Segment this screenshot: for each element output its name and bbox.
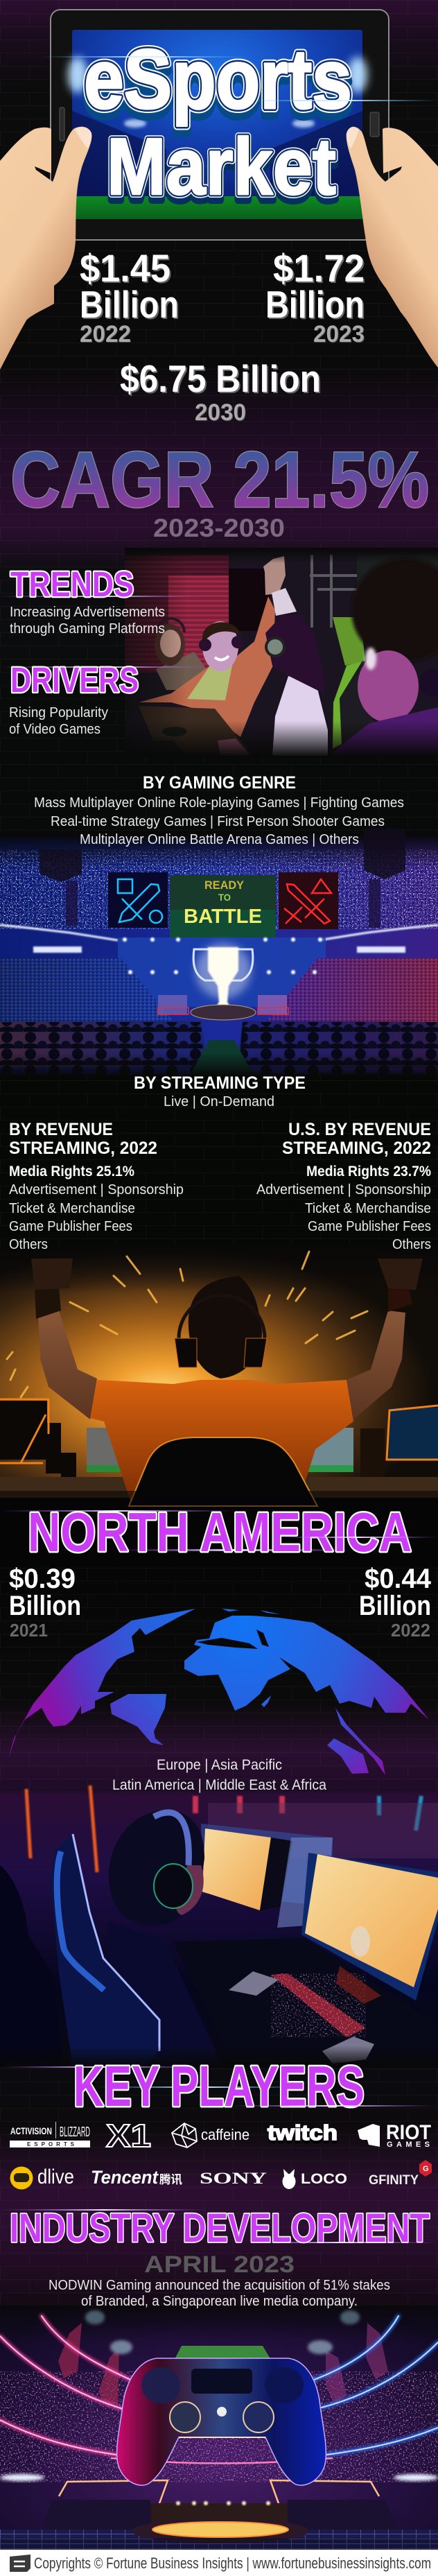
logo: twitch: twitch <box>268 2120 338 2145</box>
U.S. revenue heading: STREAMING, 2022 <box>282 1139 431 1158</box>
indonesia islands <box>335 1708 385 1775</box>
revenue list: Ticket & Merchandise <box>9 1201 135 1216</box>
back wall tint <box>208 1803 438 1858</box>
streaming list: Live | On-Demand <box>164 1094 274 1109</box>
flare <box>0 1510 236 1512</box>
right monitor <box>301 1853 438 2000</box>
revenue list: Advertisement | Sponsorship <box>9 1182 184 1198</box>
logo: dlive <box>10 2166 74 2190</box>
other regions list: Europe | Asia Pacific <box>157 1757 282 1773</box>
ready to battle text: TO <box>218 892 231 903</box>
2023 value <box>265 246 365 347</box>
center screen <box>170 875 276 937</box>
trends heading: TRENDS <box>10 564 134 604</box>
red blinds wall <box>125 555 270 673</box>
logo: activision blizzard esports <box>10 2122 90 2147</box>
pink neon arcs <box>0 2316 135 2455</box>
ready to battle text: BATTLE <box>184 906 262 928</box>
madagascar <box>261 1695 271 1707</box>
ready to battle text <box>184 879 262 928</box>
woman on left <box>155 619 207 690</box>
left hand <box>0 127 91 370</box>
fade to black <box>0 1491 438 1512</box>
tablet screen stadium <box>68 30 367 219</box>
eurasia and africa continent <box>184 1616 429 1720</box>
lens flare <box>42 56 249 58</box>
title: eSports Market: eSports <box>84 32 352 126</box>
mid wall <box>118 937 326 1007</box>
U.S. revenue list: Others <box>392 1237 431 1252</box>
other regions list: Latin America | Middle East & Africa <box>112 1777 326 1793</box>
left inner monitor <box>87 1428 133 1472</box>
2022 value: $0.44 <box>365 1564 432 1594</box>
photo: gamers high-five <box>125 548 438 757</box>
tablet side buttons <box>60 107 379 141</box>
left monitor <box>201 1824 333 1928</box>
2030 value <box>120 357 321 426</box>
revenue heading: BY REVENUE <box>9 1120 113 1139</box>
footer logo <box>10 2555 30 2572</box>
left arm and fist <box>31 1259 97 1419</box>
gaming chair <box>129 1437 317 1506</box>
other regions list <box>112 1757 326 1793</box>
2023 value: Billion <box>265 283 365 326</box>
desk <box>0 1477 438 1503</box>
man smiling with raised arm <box>139 556 297 737</box>
U.S. revenue list: Game Publisher Fees <box>308 1219 431 1234</box>
globe map <box>8 1609 429 1775</box>
drivers text: of Video Games <box>9 721 100 737</box>
foreground player <box>328 558 438 756</box>
logo: tencent: 腾讯 <box>159 2173 182 2186</box>
front crowd <box>0 1021 438 1076</box>
inland seas <box>197 1630 269 1649</box>
U.S. revenue list: Ticket & Merchandise <box>305 1201 431 1216</box>
2022 value <box>359 1564 432 1641</box>
2023 value: $1.72 <box>273 246 365 290</box>
bottom neon arc <box>111 2458 333 2463</box>
background glow bars <box>26 1786 421 1872</box>
thumb nails <box>75 128 359 148</box>
media rights: Media Rights 25.1% <box>9 1164 134 1179</box>
flare <box>277 1537 438 1538</box>
north america continent <box>8 1609 195 1759</box>
description: NODWIN Gaming announced the acquisition of 51% stakes <box>49 2278 390 2293</box>
2021 value: $0.39 <box>9 1564 76 1594</box>
revenue list: Others <box>9 1237 48 1252</box>
stage structure <box>0 2480 438 2550</box>
logo: gfinity <box>369 2160 432 2188</box>
title: eSports Market: eSports <box>84 32 352 126</box>
head and headphones <box>175 1276 267 1378</box>
revenue heading: STREAMING, 2022 <box>9 1139 157 1158</box>
green panel <box>172 2346 274 2365</box>
flare <box>0 2066 201 2068</box>
logos row one: BLIZZARD <box>60 2125 90 2140</box>
2022 value: $1.45 <box>80 246 170 290</box>
2030 value: $6.75 Billion <box>120 357 321 400</box>
gamer body <box>107 1921 223 2067</box>
title: eSports Market: eSports <box>84 39 352 133</box>
north america heading <box>0 1501 438 1563</box>
drivers block <box>0 660 208 737</box>
banners and smoke <box>58 2310 388 2406</box>
north america values <box>9 1564 432 1641</box>
tablet body <box>51 10 389 240</box>
title: eSports Market: Market <box>107 121 336 211</box>
revenue list: Game Publisher Fees <box>9 1219 132 1234</box>
green gaming chair <box>333 617 374 749</box>
2022 value <box>80 246 179 347</box>
stats: market size <box>80 246 365 426</box>
logo: gfinity: G <box>423 2165 429 2173</box>
trophy <box>193 943 253 1015</box>
photo: victorious gamer <box>0 1245 438 1567</box>
2022 value: 2022 <box>80 321 131 347</box>
arena light strips <box>0 925 438 953</box>
2030 value: 2030 <box>195 399 246 426</box>
logos row one <box>10 2118 431 2154</box>
woman from behind <box>265 615 328 756</box>
logo: activision blizzard esports: ACTIVISION <box>10 2125 52 2136</box>
northern islands <box>222 1609 281 1614</box>
right inner monitor <box>305 1428 353 1472</box>
arena photo <box>0 829 438 1076</box>
gamer hands <box>229 1971 374 2064</box>
logo: riot games <box>358 2121 431 2149</box>
logo: riot games: RIOT <box>386 2121 431 2144</box>
U.S. revenue list: Advertisement | Sponsorship <box>256 1182 431 1198</box>
genre list: Multiplayer Online Battle Arena Games | Others <box>80 832 359 847</box>
blue neon arcs <box>308 2316 438 2455</box>
australia <box>327 1738 369 1774</box>
U.S. revenue heading: U.S. BY REVENUE <box>288 1120 431 1139</box>
flare <box>0 2209 208 2211</box>
photo: gamer at monitors <box>0 1786 438 2068</box>
genre list: Real-time Strategy Games | First Person Shooter Games <box>51 814 385 829</box>
genre list: Mass Multiplayer Online Role-playing Games | Fighting Games <box>34 795 404 811</box>
U.S. by revenue streaming column <box>256 1120 431 1252</box>
title: eSports Market: Market <box>107 127 336 217</box>
right neon screen <box>279 872 338 929</box>
logo: x1: X1 <box>106 2118 151 2154</box>
left neon screen <box>108 872 168 928</box>
orange jersey <box>90 1380 353 1505</box>
trends text: Increasing Advertisements <box>10 604 165 620</box>
flare <box>97 2086 305 2088</box>
industry development details <box>49 2251 390 2309</box>
stadium lights <box>0 2474 438 2481</box>
gamer head and headset <box>109 1810 204 1925</box>
2022 value: 2022 <box>391 1620 430 1641</box>
desk and keyboards <box>139 706 253 756</box>
drivers heading: DRIVERS <box>10 660 139 700</box>
2023 value: 2023 <box>313 321 365 347</box>
drivers flare <box>0 666 208 668</box>
logos row two <box>10 2160 432 2190</box>
dark monitor block left <box>0 1401 76 1477</box>
logo: loco <box>283 2169 347 2189</box>
right hand <box>347 127 438 368</box>
by revenue streaming column <box>9 1120 184 1252</box>
flare <box>243 2242 438 2243</box>
stage <box>158 995 288 1020</box>
2021 value: 2021 <box>10 1620 48 1641</box>
lens flare <box>249 100 438 101</box>
tablet held in hands <box>0 10 438 370</box>
title: eSports Market <box>84 32 352 217</box>
logo: gfinity: GFINITY <box>369 2173 419 2188</box>
logo: caffeine <box>172 2123 249 2147</box>
logo: dlive: dlive <box>37 2166 74 2188</box>
logo: riot games: GAMES <box>387 2141 430 2149</box>
controller <box>117 2358 326 2485</box>
ready to battle text: READY <box>204 879 245 892</box>
lower stands <box>0 958 438 1033</box>
keyboard and desk <box>173 1938 438 2067</box>
right monitor <box>360 1406 438 1477</box>
logo: loco: LOCO <box>301 2171 347 2187</box>
right arm and fist <box>347 1259 423 1419</box>
description: of Branded, a Singaporean live media company. <box>81 2294 358 2309</box>
logo: activision blizzard esports: ESPORTS <box>27 2141 75 2147</box>
title: eSports Market: eSports <box>84 32 352 126</box>
truss <box>310 555 360 628</box>
2021 value <box>9 1564 81 1641</box>
streaming heading: BY STREAMING TYPE <box>134 1073 306 1093</box>
orange glow background <box>0 1248 438 1487</box>
trends block <box>0 564 201 637</box>
arena upper stands <box>0 834 438 1075</box>
sparks <box>7 1252 367 1397</box>
trends flare <box>0 596 201 597</box>
title: eSports Market: Market <box>107 121 336 211</box>
left monitor neon <box>0 1399 49 1463</box>
by gaming genre <box>34 773 404 847</box>
genre heading: BY GAMING GENRE <box>143 773 296 793</box>
flare <box>118 1549 353 1551</box>
hanging banners <box>40 829 405 882</box>
2022 value: Billion <box>80 283 179 326</box>
2021 value: Billion <box>9 1591 81 1621</box>
logo: tencent: Tencent <box>91 2167 159 2188</box>
flare <box>229 2105 437 2107</box>
south america continent <box>110 1694 166 1745</box>
game controller stage image <box>0 2306 438 2550</box>
second chair left <box>0 1865 62 2067</box>
logo: sony: SONY <box>200 2170 268 2187</box>
arena lights <box>123 937 322 974</box>
date: APRIL 2023 <box>144 2251 295 2278</box>
by streaming type <box>134 1073 306 1109</box>
footer copyright bar <box>0 2550 438 2576</box>
drivers text: Rising Popularity <box>9 704 109 720</box>
title: eSports Market: Market <box>107 121 336 211</box>
photo fades <box>125 548 187 756</box>
gaming chair <box>51 1834 159 2067</box>
CAGR heading: 2023-2030 <box>153 514 285 542</box>
logo: caffeine: caffeine <box>201 2126 249 2143</box>
trends text: through Gaming Platforms <box>10 621 165 637</box>
